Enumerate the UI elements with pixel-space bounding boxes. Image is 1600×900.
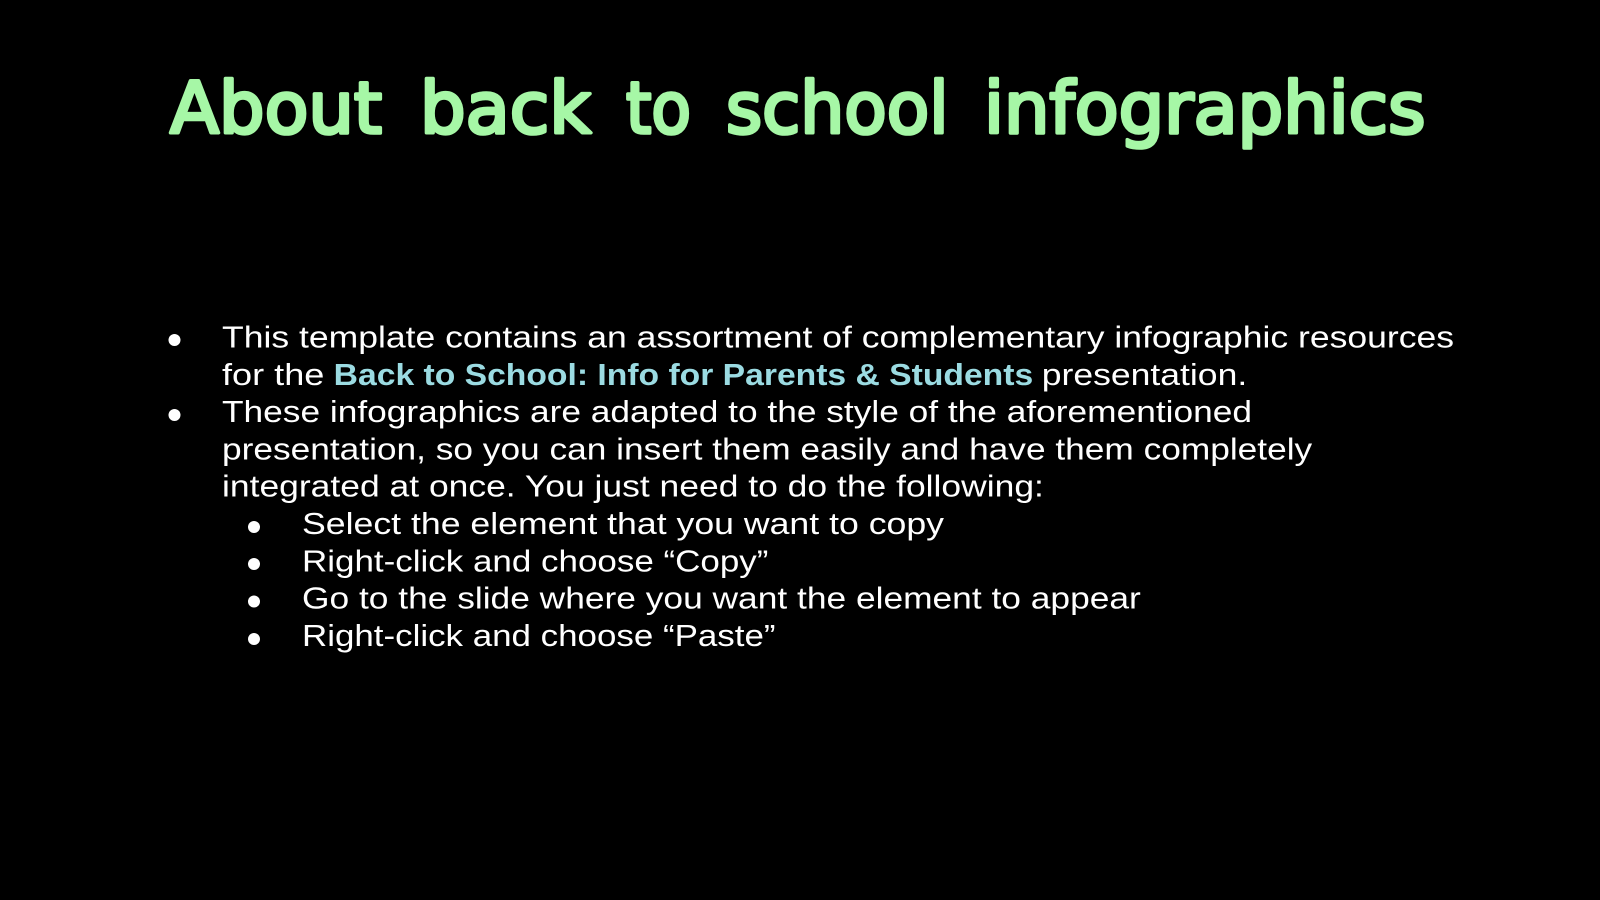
step 3 text: Go to the slide where you want the element to appear: [302, 580, 1141, 616]
bullet 1 text: presentation.: [1042, 357, 1247, 392]
step 1 text: Select the element that you want to copy: [302, 506, 945, 541]
bullet 1 text: [222, 320, 1454, 392]
title: to: [626, 67, 691, 150]
step 1 marker: [248, 521, 260, 533]
bullet 2 text: integrated at once. You just need to do the following:: [222, 468, 1044, 504]
title: About: [170, 67, 382, 150]
bullet 2 text: These infographics are adapted to the style of the aforementioned: [222, 394, 1252, 429]
bullet 2 text: [222, 394, 1313, 504]
step 4 marker: [248, 633, 260, 645]
step 4 text: Right-click and choose “Paste”: [302, 618, 776, 653]
step 3 marker: [248, 596, 260, 608]
bullet 2 marker: [168, 409, 180, 421]
title: back: [420, 67, 591, 150]
bullet 1 marker: [168, 334, 180, 346]
bullet list: main text: [168, 320, 1454, 504]
bullet 1 text: This template contains an assortment of complementary infographic resources: [222, 320, 1454, 354]
bullet 1 text: Back to School: Info for Parents & Students: [334, 357, 1033, 392]
title: school: [726, 67, 948, 150]
bullet 1 text: for the: [222, 357, 324, 392]
bullet 2 text: presentation, so you can insert them easily and have them completely: [222, 432, 1313, 466]
step 2 marker: [248, 558, 260, 570]
step 2 text: Right-click and choose “Copy”: [302, 544, 768, 578]
title: infographics: [984, 67, 1426, 150]
sub-bullet list: steps: [248, 506, 1141, 653]
